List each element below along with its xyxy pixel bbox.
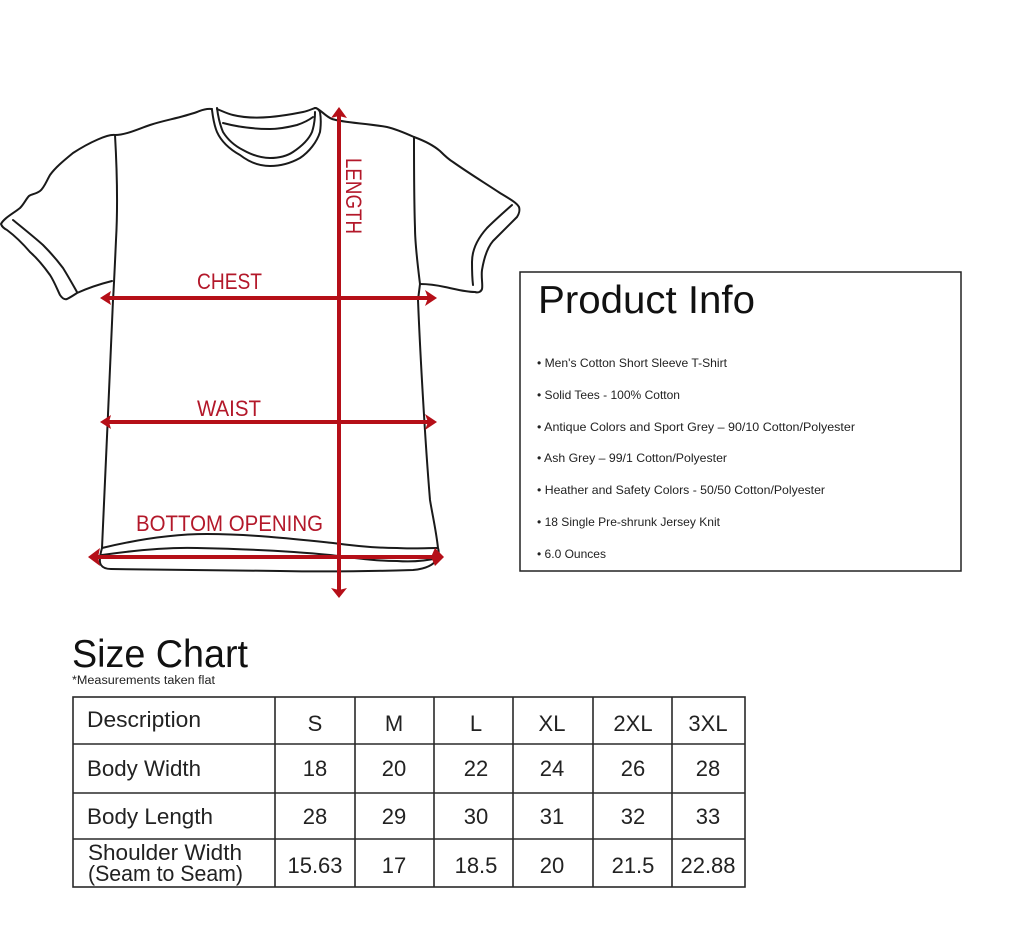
table values: 3XL (688, 711, 728, 736)
chest arrow (100, 290, 437, 306)
row labels: Description (87, 707, 201, 732)
row labels: Body Width (87, 756, 201, 781)
table values: L (470, 711, 482, 736)
label: length: LENGTH (341, 158, 366, 234)
table values: 28 (696, 756, 720, 781)
table values: 28 (303, 804, 327, 829)
size chart heading: Size Chart (72, 633, 248, 676)
table values: XL (539, 711, 565, 736)
panel: product info (520, 272, 961, 571)
product info list: • Heather and Safety Colors - 50/50 Cotton/Polyester (537, 483, 825, 497)
t-shirt outline (1, 108, 519, 571)
table values: 20 (382, 756, 406, 781)
label: bottom opening: BOTTOM OPENING (136, 511, 323, 536)
table values: 24 (540, 756, 564, 781)
label: chest: CHEST (197, 269, 262, 294)
table values: 32 (621, 804, 645, 829)
product info list: • Ash Grey – 99/1 Cotton/Polyester (537, 451, 727, 465)
product info list: • Antique Colors and Sport Grey – 90/10 Cotton/Polyester (537, 420, 855, 434)
row labels (87, 707, 243, 886)
table values: 15.63 (287, 853, 343, 878)
table values: 18 (303, 756, 327, 781)
product info list: • Solid Tees - 100% Cotton (537, 388, 680, 402)
product info list: • 18 Single Pre-shrunk Jersey Knit (537, 515, 721, 529)
table values: 22.88 (680, 853, 736, 878)
row labels: (Seam to Seam) (88, 861, 243, 886)
measurement note: *Measurements taken flat (72, 675, 216, 687)
table values: 31 (540, 804, 564, 829)
table values: 17 (382, 853, 406, 878)
product info list: • 6.0 Ounces (537, 547, 606, 561)
waist arrow (100, 414, 437, 430)
product info list: • Men's Cotton Short Sleeve T-Shirt (537, 356, 728, 370)
table values: 2XL (613, 711, 653, 736)
length arrow (331, 107, 347, 598)
product info heading: Product Info (538, 279, 755, 322)
product info list (537, 356, 855, 561)
table values: 30 (464, 804, 488, 829)
table values: 22 (464, 756, 488, 781)
table values (287, 711, 736, 878)
row labels: Body Length (87, 804, 213, 829)
bottom opening arrow (88, 548, 444, 566)
table values: 26 (621, 756, 645, 781)
row labels: Shoulder Width (88, 840, 242, 865)
label: waist: WAIST (197, 396, 261, 421)
table values: 18.5 (455, 853, 497, 878)
table values: 21.5 (612, 853, 654, 878)
table values: S (308, 711, 322, 736)
table values: M (385, 711, 403, 736)
table values: 29 (382, 804, 406, 829)
table values: 20 (540, 853, 564, 878)
table values: 33 (696, 804, 720, 829)
size chart table (73, 697, 745, 887)
